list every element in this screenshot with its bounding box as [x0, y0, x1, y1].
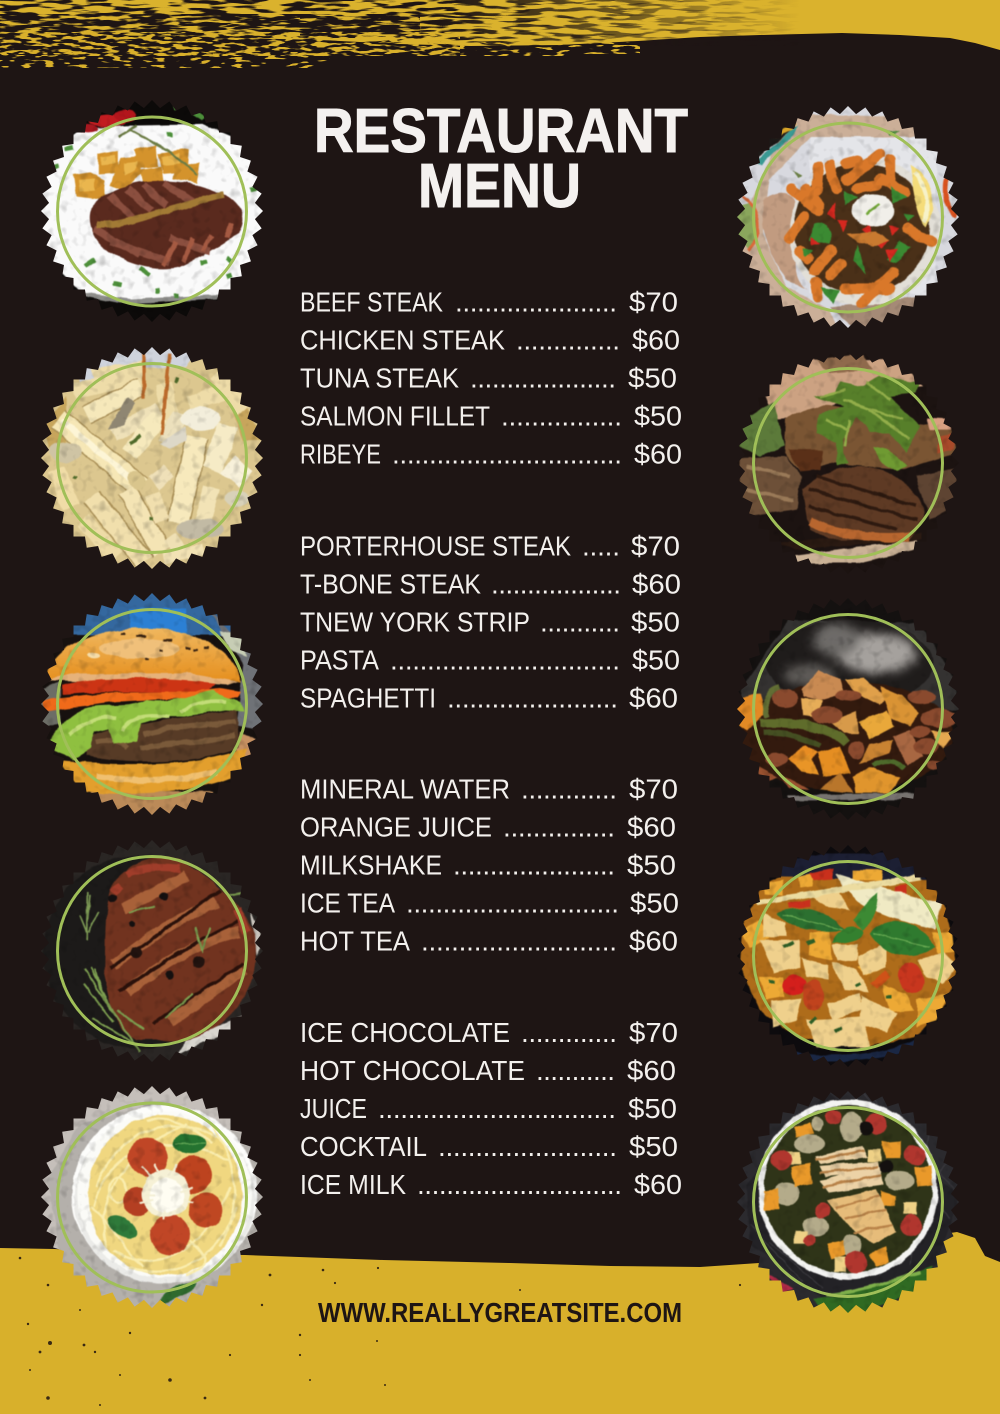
ring: left 4 — [58, 856, 246, 1046]
item: ice milk: ICE MILK — [300, 1169, 406, 1200]
item: milkshake: MILKSHAKE — [300, 850, 442, 880]
ring: right 2 — [754, 368, 942, 558]
badge: sweet potato fries — [737, 106, 959, 328]
item: mineral water: ............. — [521, 774, 617, 804]
item: ice milk — [300, 1169, 682, 1200]
item: cocktail: ........................ — [438, 1131, 617, 1162]
item: porterhouse steak: ..... — [582, 530, 620, 561]
item: orange juice: ............... — [503, 812, 615, 842]
decorative green rings — [58, 117, 942, 1296]
ring: right 3 — [754, 614, 942, 804]
badge: chicken with basil — [737, 845, 959, 1067]
ring: right 4 — [754, 862, 942, 1050]
item: milkshake: $50 — [627, 850, 676, 880]
item: pasta: PASTA — [300, 644, 379, 675]
item: beef steak: ...................... — [455, 286, 617, 318]
item: hot tea: .......................... — [421, 926, 617, 956]
item: tuna steak: $50 — [628, 362, 677, 394]
badge: steak with potatoes — [41, 100, 263, 322]
item: t-bone steak: T-BONE STEAK — [300, 568, 481, 599]
item: cocktail: COCKTAIL — [300, 1131, 427, 1162]
ring: right 1 — [754, 123, 942, 312]
item: salmon fillet: SALMON FILLET — [300, 400, 490, 432]
item: new york strip: TNEW YORK STRIP — [300, 606, 530, 637]
ring: right 5 — [754, 1108, 942, 1296]
badge: burger — [41, 593, 263, 815]
item: milkshake — [300, 850, 676, 880]
item: pasta — [300, 644, 680, 675]
top yellow brush stroke — [0, 0, 1000, 68]
menu section: cold and hot drinks — [300, 774, 679, 956]
item: hot chocolate: $60 — [627, 1055, 676, 1086]
item: mineral water — [300, 774, 678, 804]
item: cocktail — [300, 1131, 678, 1162]
item: salmon fillet — [300, 400, 682, 432]
item: ice milk: ............................ — [417, 1169, 622, 1200]
menu section: steaks — [300, 286, 682, 470]
item: ice tea: ............................. — [406, 888, 619, 918]
bottom yellow brush stroke — [0, 1232, 1000, 1414]
item: spaghetti: ....................... — [447, 682, 618, 713]
item: salmon fillet: ................ — [501, 400, 622, 432]
item: beef steak: BEEF STEAK — [300, 286, 443, 318]
item: new york strip: ........... — [540, 606, 620, 637]
item: cocktail: $50 — [629, 1131, 678, 1162]
item: chicken steak: $60 — [632, 324, 680, 356]
item: ice tea — [300, 888, 679, 918]
badge: spaghetti and meatballs — [41, 1086, 263, 1308]
ring: left 2 — [58, 364, 246, 552]
item: beef steak — [300, 286, 678, 318]
item: ice chocolate: $70 — [629, 1017, 678, 1048]
ring: left 1 — [58, 117, 246, 306]
item: chicken steak: CHICKEN STEAK — [300, 324, 505, 356]
badge: chicken grain bowl — [737, 1091, 959, 1313]
item: pasta: ............................... — [390, 644, 620, 675]
ring: left 3 — [58, 610, 246, 798]
item: spaghetti: SPAGHETTI — [300, 682, 436, 713]
item: ribeye: RIBEYE — [300, 438, 381, 470]
item: hot tea: $60 — [629, 926, 678, 956]
item: orange juice: $60 — [627, 812, 676, 842]
item: hot chocolate — [300, 1055, 676, 1086]
ring: left 5 — [58, 1103, 246, 1292]
item: ribeye: $60 — [634, 438, 682, 470]
menu section: cuts and pasta — [300, 530, 681, 713]
item: t-bone steak: .................. — [491, 568, 621, 599]
item: t-bone steak — [300, 568, 681, 599]
website address: WWW.REALLYGREATSITE.COM — [318, 1297, 682, 1328]
item: new york strip — [300, 606, 680, 637]
item: ice chocolate — [300, 1017, 678, 1048]
item: pasta: $50 — [632, 644, 680, 675]
item: t-bone steak: $60 — [632, 568, 681, 599]
item: tuna steak — [300, 362, 677, 394]
item: orange juice — [300, 812, 676, 842]
item: salmon fillet: $50 — [634, 400, 682, 432]
item: ice milk: $60 — [634, 1169, 682, 1200]
badge: penne pasta — [41, 347, 263, 569]
item: hot tea: HOT TEA — [300, 926, 410, 956]
badge: grilled pork chops — [739, 354, 957, 566]
badge: stew with steam — [737, 598, 959, 820]
item: juice: $50 — [628, 1093, 677, 1124]
item: beef steak: $70 — [629, 286, 678, 318]
item: tuna steak: TUNA STEAK — [300, 362, 459, 394]
title — [314, 97, 688, 221]
badge: grilled ribeye — [41, 840, 262, 1062]
item: juice: ................................ — [378, 1093, 616, 1124]
title: RESTAURANT — [314, 97, 688, 166]
item: tuna steak: .................... — [470, 362, 616, 394]
item: ice chocolate: ICE CHOCOLATE — [300, 1017, 510, 1048]
item: mineral water: $70 — [629, 774, 678, 804]
item: porterhouse steak: $70 — [631, 530, 680, 561]
item: orange juice: ORANGE JUICE — [300, 812, 492, 842]
item: spaghetti — [300, 682, 678, 713]
item: juice: JUICE — [300, 1093, 367, 1124]
item: ribeye: ............................... — [392, 438, 622, 470]
menu section: chocolate and others — [300, 1017, 682, 1200]
title: MENU — [418, 152, 581, 221]
item: chicken steak: .............. — [516, 324, 620, 356]
item: ice tea: ICE TEA — [300, 888, 395, 918]
item: porterhouse steak: PORTERHOUSE STEAK — [300, 530, 571, 561]
item: spaghetti: $60 — [629, 682, 678, 713]
item: ice chocolate: ............. — [521, 1017, 617, 1048]
item: hot chocolate: HOT CHOCOLATE — [300, 1055, 525, 1086]
item: new york strip: $50 — [631, 606, 680, 637]
item: ice tea: $50 — [630, 888, 679, 918]
item: hot chocolate: ........... — [536, 1055, 615, 1086]
item: chicken steak — [300, 324, 680, 356]
item: milkshake: ...................... — [453, 850, 615, 880]
item: hot tea — [300, 926, 678, 956]
item: juice — [300, 1093, 677, 1124]
item: mineral water: MINERAL WATER — [300, 774, 510, 804]
item: ribeye — [300, 438, 682, 470]
